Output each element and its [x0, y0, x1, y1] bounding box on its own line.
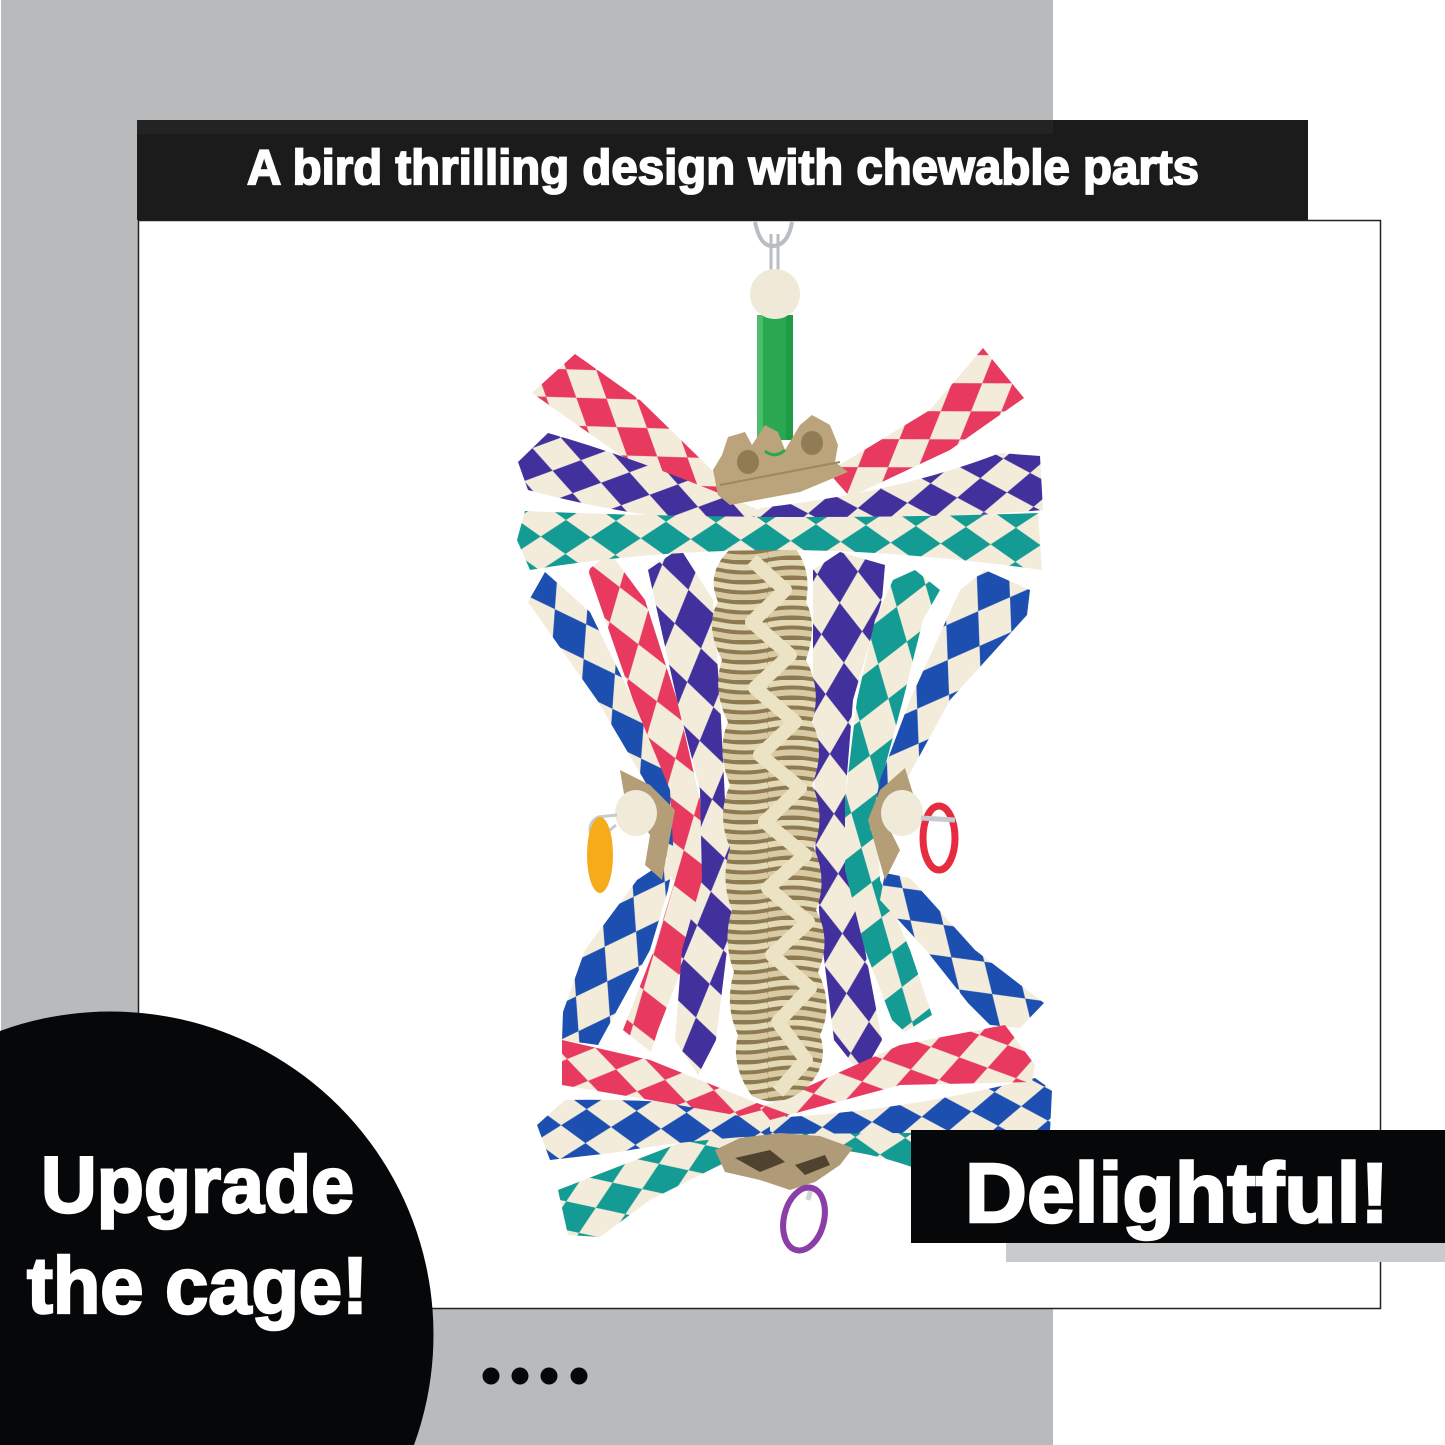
top horizontal strip: purple left: [518, 433, 775, 527]
yellow ring: [587, 817, 613, 893]
right wire loop: [921, 818, 955, 820]
bottom horizontal strip: blue left: [537, 1100, 790, 1160]
woven vine column: [712, 538, 827, 1101]
product frame panel: [138, 220, 1380, 1308]
vertical strip: blue right top: [870, 570, 1030, 830]
black corner badge: [0, 1012, 433, 1445]
bird toy product illustration: [517, 222, 1052, 1255]
callout: Delightful: Delightful!: [965, 1146, 1389, 1240]
vertical strip: blue right bottom: [880, 873, 1044, 1028]
bottom horizontal strip: red left: [562, 1040, 770, 1116]
vertical strip: purple left: [648, 548, 735, 1075]
vertical strip: blue left top: [528, 572, 690, 880]
bottom horizontal strip: blue right: [770, 1078, 1052, 1134]
top cardboard crown: [713, 415, 848, 505]
top horizontal strip: purple right: [745, 453, 1043, 527]
title text: A bird thrilling design with chewable parts: [247, 141, 1199, 195]
top horizontal strip: teal: [517, 511, 1042, 570]
grey background panel: [1, 0, 1053, 1445]
braid spine: [752, 560, 810, 1092]
bottom cardboard: [715, 1133, 853, 1190]
title banner: [137, 120, 1308, 220]
top horizontal strip: red left: [532, 354, 722, 506]
bottom horizontal strip: red right: [760, 1025, 1035, 1120]
pagination dots: [482, 1368, 588, 1384]
top bead: [750, 269, 800, 319]
bottom wire: [808, 1185, 812, 1200]
green tube: [757, 315, 793, 440]
bottom horizontal strip: teal right: [780, 1128, 925, 1172]
right bead: [881, 790, 923, 836]
badge text line 2: the cage!: [27, 1241, 368, 1330]
purple ring: [777, 1183, 831, 1255]
right side cardboard: [868, 768, 915, 880]
vertical strip: teal right: [845, 570, 940, 1032]
left bead: [615, 790, 657, 836]
bottom horizontal strip: teal left: [558, 1130, 760, 1237]
top horizontal strip: red right: [828, 348, 1024, 497]
red ring: [923, 806, 955, 870]
left side cardboard: [620, 770, 675, 880]
callout shadow: [1006, 1243, 1445, 1262]
callout: Delightful: [911, 1130, 1445, 1243]
vertical strip: red: [588, 553, 705, 1052]
badge text line 1: Upgrade: [41, 1140, 354, 1229]
vertical strip: blue left bottom: [562, 855, 675, 1045]
left wire loop: [590, 815, 617, 838]
hanging hook: [755, 222, 792, 272]
vertical strip: purple right: [813, 552, 885, 1075]
